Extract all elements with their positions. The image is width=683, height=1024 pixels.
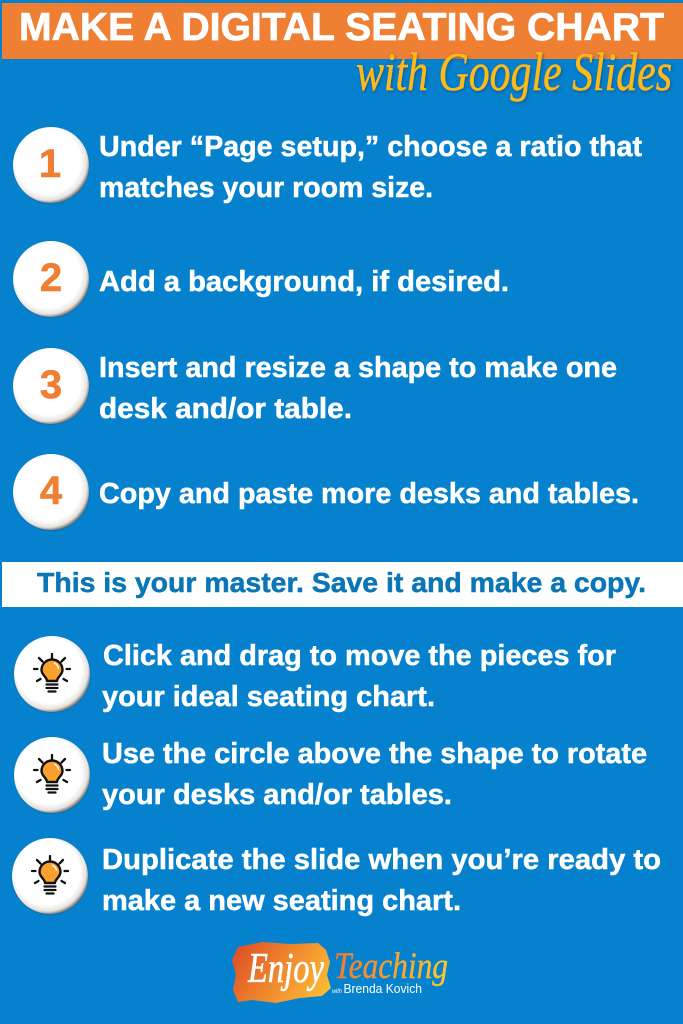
- tip 1 text: [102, 640, 616, 713]
- step 3: [13, 348, 617, 425]
- icon: light bulb: [14, 737, 90, 813]
- number badge 3: 3: [40, 363, 62, 407]
- number badge 2: [13, 241, 89, 317]
- master callout band: [2, 562, 683, 607]
- tip 1 text: your ideal seating chart.: [102, 681, 435, 713]
- tip 2 text: your desks and/or tables.: [102, 779, 452, 811]
- callout text: This is your master. Save it and make a copy.: [37, 567, 646, 598]
- number badge 4: [13, 454, 89, 530]
- logo: Enjoy Teaching: [232, 942, 448, 1003]
- number badge 2: 2: [40, 256, 62, 300]
- step 1 text: [99, 131, 643, 204]
- logo byline: with Brenda Kovich: [332, 981, 422, 996]
- title banner: [2, 3, 683, 59]
- tip 3 text: make a new seating chart.: [102, 885, 461, 917]
- step 2: [13, 241, 509, 317]
- title: MAKE A DIGITAL SEATING CHART: [19, 6, 664, 49]
- logo paint blob: [232, 942, 331, 1003]
- step 4: [13, 454, 639, 530]
- step 4 text: Copy and paste more desks and tables.: [99, 478, 639, 510]
- step 3 text: [99, 352, 617, 425]
- icon: light bulb: [14, 636, 90, 712]
- tip 2: [14, 737, 647, 813]
- logo word Teaching: Teaching: [334, 946, 448, 987]
- number badge 1: 1: [39, 142, 61, 186]
- tip 2 text: Use the circle above the shape to rotate: [102, 738, 647, 770]
- tip 3 text: [102, 844, 661, 917]
- step 3 text: Insert and resize a shape to make one: [99, 352, 617, 384]
- tip 2 text: [102, 738, 647, 811]
- tip 1 text: Click and drag to move the pieces for: [103, 640, 616, 672]
- step 3 text: desk and/or table.: [99, 393, 352, 425]
- step 1 text: matches your room size.: [99, 172, 433, 204]
- tip 3 text: Duplicate the slide when you’re ready to: [102, 844, 661, 876]
- number badge 3: [13, 348, 89, 424]
- step 2 text: Add a background, if desired.: [99, 266, 509, 298]
- icon: light bulb: [12, 838, 88, 914]
- tip 1: [14, 636, 616, 713]
- step 1 text: Under “Page setup,” choose a ratio that: [99, 131, 643, 163]
- logo word Enjoy: Enjoy: [247, 946, 324, 992]
- tip 3: [12, 838, 661, 917]
- number badge 1: [13, 127, 89, 203]
- step 1: [13, 127, 643, 204]
- number badge 4: 4: [40, 469, 63, 513]
